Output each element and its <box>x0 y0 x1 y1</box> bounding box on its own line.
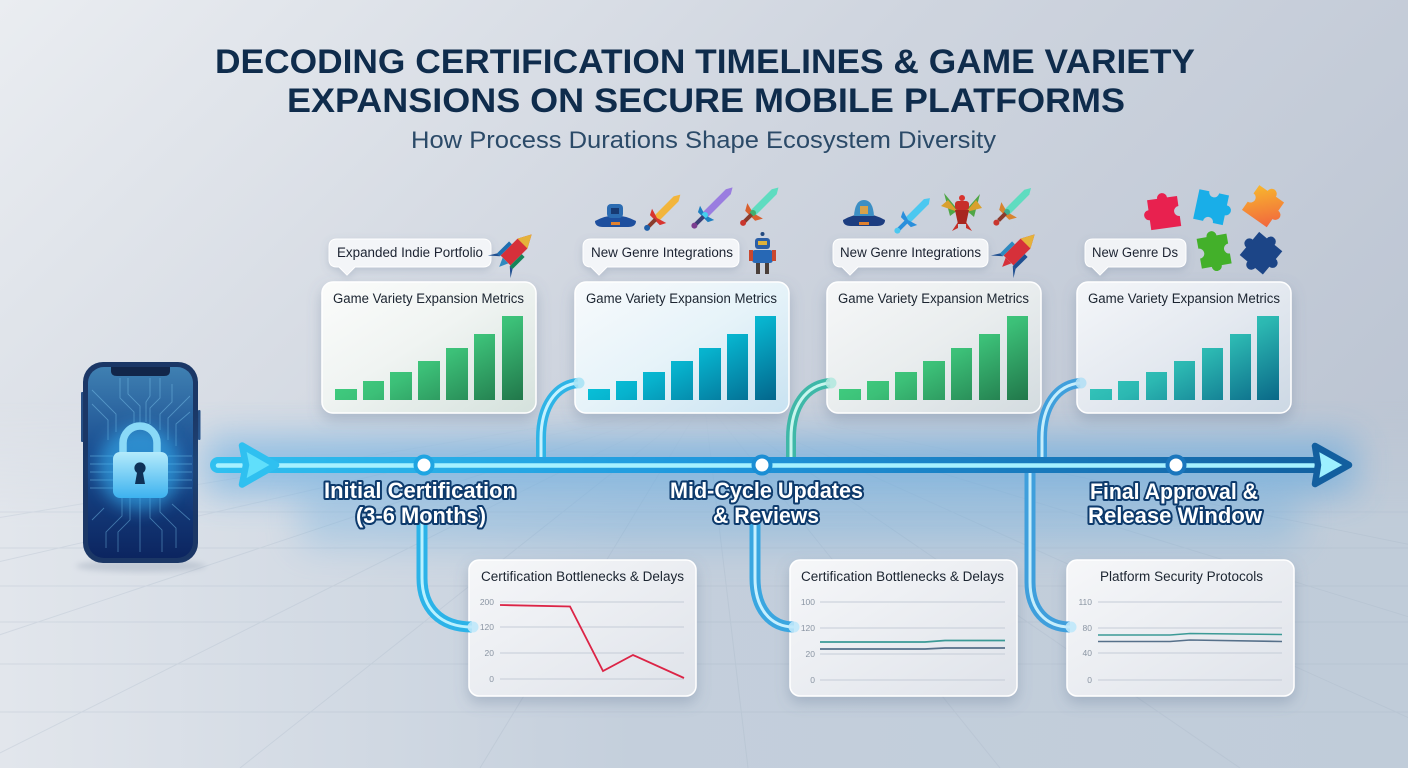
label: mid-cycle updates: & Reviews <box>713 503 819 528</box>
axis labels: 0 <box>489 674 494 684</box>
icon: secure phone with padlock <box>76 362 206 572</box>
icon: rocket 2 <box>991 223 1046 278</box>
panel heading: Game Variety Expansion Metrics <box>586 291 777 306</box>
axis labels <box>480 597 494 684</box>
line chart <box>820 602 1005 680</box>
title: EXPANSIONS ON SECURE MOBILE PLATFORMS <box>287 82 1125 120</box>
callout: new genre integrations <box>583 239 739 275</box>
arrowhead: start <box>242 446 276 484</box>
axis labels: 0 <box>1087 675 1092 685</box>
axis labels: 110 <box>1078 597 1092 607</box>
title <box>215 43 1195 120</box>
floor grid <box>0 500 1028 768</box>
bar chart <box>1090 316 1279 400</box>
panel: certification bottlenecks, red line <box>469 560 696 696</box>
connector: timeline to cyan metrics card <box>541 378 584 462</box>
panel: game variety metrics, green 2 <box>827 282 1041 413</box>
panel: game variety metrics, green <box>322 282 536 413</box>
milestone node 3 <box>1166 454 1186 476</box>
axis labels: 100 <box>801 597 815 607</box>
callout: new genre integrations: New Genre Integrations <box>591 245 733 260</box>
bar chart <box>588 316 776 400</box>
label: mid-cycle updates: Mid-Cycle Updates <box>670 478 863 503</box>
axis labels: 20 <box>806 649 815 659</box>
axis labels: 200 <box>480 597 494 607</box>
icon: dragon <box>941 193 982 231</box>
icon: puzzle piece blue <box>1193 189 1234 226</box>
arrowhead: end <box>1315 446 1349 484</box>
connector: final approval to security protocols chart <box>1030 470 1076 632</box>
icon: spaceship <box>595 204 636 227</box>
title: DECODING CERTIFICATION TIMELINES & GAME VARIETY <box>215 43 1195 81</box>
bar chart <box>839 316 1028 400</box>
label: final approval <box>1088 479 1263 528</box>
connector: mid-cycle to bottlenecks chart <box>755 520 800 632</box>
line chart <box>500 602 684 679</box>
icon: sword teal <box>733 180 786 233</box>
icon: robot character <box>749 232 776 274</box>
panel heading: Certification Bottlenecks & Delays <box>481 569 684 584</box>
callout: expanded indie portfolio: Expanded Indie Portfolio <box>337 245 483 260</box>
label: final approval: Final Approval & <box>1090 479 1258 504</box>
icon: rocket <box>488 223 543 278</box>
label: final approval: Release Window <box>1088 503 1263 528</box>
icon: puzzle piece red <box>1141 191 1181 231</box>
axis labels: 0 <box>810 675 815 685</box>
callout: new genre integrations 2: New Genre Integrations <box>840 245 981 260</box>
panel heading: Certification Bottlenecks & Delays <box>801 569 1004 584</box>
icon: sword blue <box>888 191 937 240</box>
icon: sword teal 2 <box>986 180 1039 233</box>
axis labels: 120 <box>480 622 494 632</box>
icon: sword purple <box>685 180 740 235</box>
line chart <box>1098 602 1282 680</box>
connector: timeline to teal metrics card <box>1042 378 1086 462</box>
label: initial certification: Initial Certification <box>324 478 516 503</box>
subtitle: How Process Durations Shape Ecosystem Diversity <box>411 127 996 154</box>
callout: new genre ds <box>1085 239 1186 275</box>
panel heading: Game Variety Expansion Metrics <box>333 291 524 306</box>
icon: spaceship 2 <box>843 200 885 226</box>
callout: new genre ds: New Genre Ds <box>1092 245 1178 260</box>
panel heading: Game Variety Expansion Metrics <box>1088 291 1280 306</box>
label: mid-cycle updates <box>670 478 863 528</box>
axis labels: 40 <box>1083 648 1092 658</box>
panel: certification bottlenecks, flat lines <box>790 560 1017 696</box>
panel heading: Game Variety Expansion Metrics <box>838 291 1029 306</box>
panel: platform security protocols <box>1067 560 1294 696</box>
axis labels: 20 <box>485 648 494 658</box>
milestone node 1 <box>414 454 434 476</box>
axis labels <box>1078 597 1092 685</box>
panel: game variety metrics, teal <box>1077 282 1291 413</box>
icon: puzzle piece green <box>1196 229 1233 274</box>
panel: game variety metrics, cyan <box>575 282 789 413</box>
axis labels: 80 <box>1083 623 1092 633</box>
timeline glow <box>205 438 1355 545</box>
icon: puzzle piece orange <box>1242 181 1291 230</box>
connector: initial certification to bottlenecks chart <box>422 520 478 632</box>
connector: timeline to green metrics card <box>791 378 836 462</box>
panel heading: Platform Security Protocols <box>1100 569 1263 584</box>
icon: puzzle piece navy <box>1233 225 1289 282</box>
label: initial certification: (3-6 Months) <box>356 503 486 528</box>
axis labels <box>801 597 815 685</box>
callout: new genre integrations 2 <box>833 239 988 275</box>
label: initial certification <box>324 478 516 528</box>
callout: expanded indie portfolio <box>329 239 491 275</box>
icon: sword gold <box>638 188 687 237</box>
bar chart <box>335 316 523 400</box>
axis labels: 120 <box>801 623 815 633</box>
timeline arrow <box>218 446 1349 484</box>
milestone node 2 <box>752 454 772 476</box>
